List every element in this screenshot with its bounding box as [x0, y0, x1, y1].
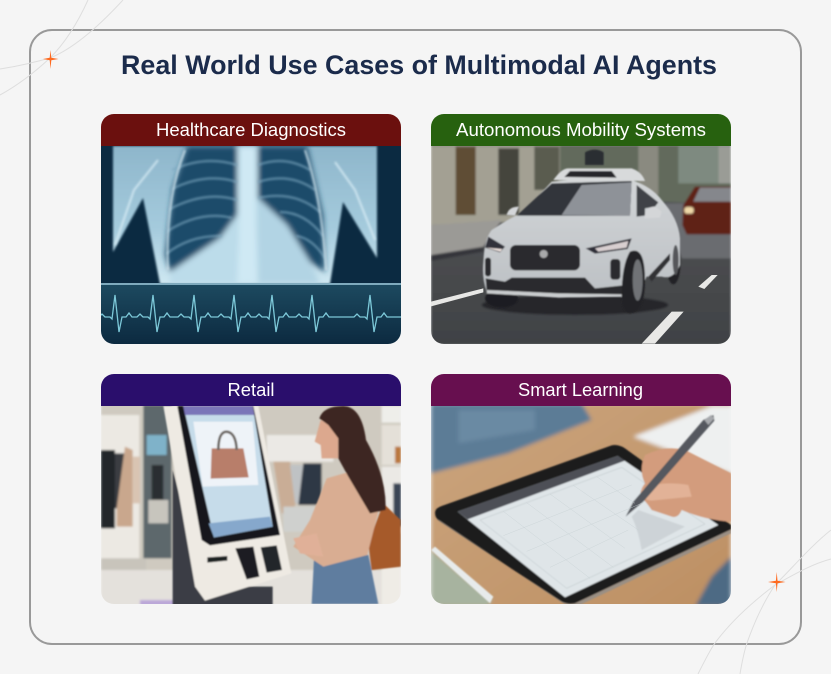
label: autonomous mobility systems: Autonomous Mobility Systems [456, 120, 706, 140]
icon: orange sparkle bottom right [768, 572, 786, 592]
header: healthcare diagnostics [101, 114, 401, 146]
woman [312, 555, 378, 604]
red car [682, 187, 731, 234]
header: smart learning [431, 374, 731, 406]
icon: orange sparkle top left [43, 50, 58, 69]
image: retail kiosk with shopper [101, 403, 401, 610]
panel: autonomous mobility systems [431, 114, 731, 345]
kiosk [173, 470, 273, 607]
label: smart learning: Smart Learning [518, 380, 643, 400]
label: healthcare diagnostics: Healthcare Diagnostics [156, 120, 346, 140]
image: self-driving car [431, 145, 731, 345]
panel: smart learning [431, 374, 731, 610]
panel: retail [101, 374, 401, 610]
background curves: top left [0, 0, 123, 95]
image: tablet with stylus [431, 403, 731, 610]
panel: healthcare diagnostics [99, 114, 401, 344]
car [484, 293, 518, 307]
chart: ecg strip [99, 283, 401, 344]
title: Real World Use Cases of Multimodal AI Agents [121, 50, 717, 80]
hand and pen [641, 448, 731, 522]
label: retail: Retail [228, 380, 274, 400]
header: autonomous mobility systems [431, 114, 731, 146]
header: retail [101, 374, 401, 406]
background curves: bottom right [698, 530, 831, 674]
image: chest x-ray [101, 146, 401, 286]
shadow under car [482, 295, 668, 315]
